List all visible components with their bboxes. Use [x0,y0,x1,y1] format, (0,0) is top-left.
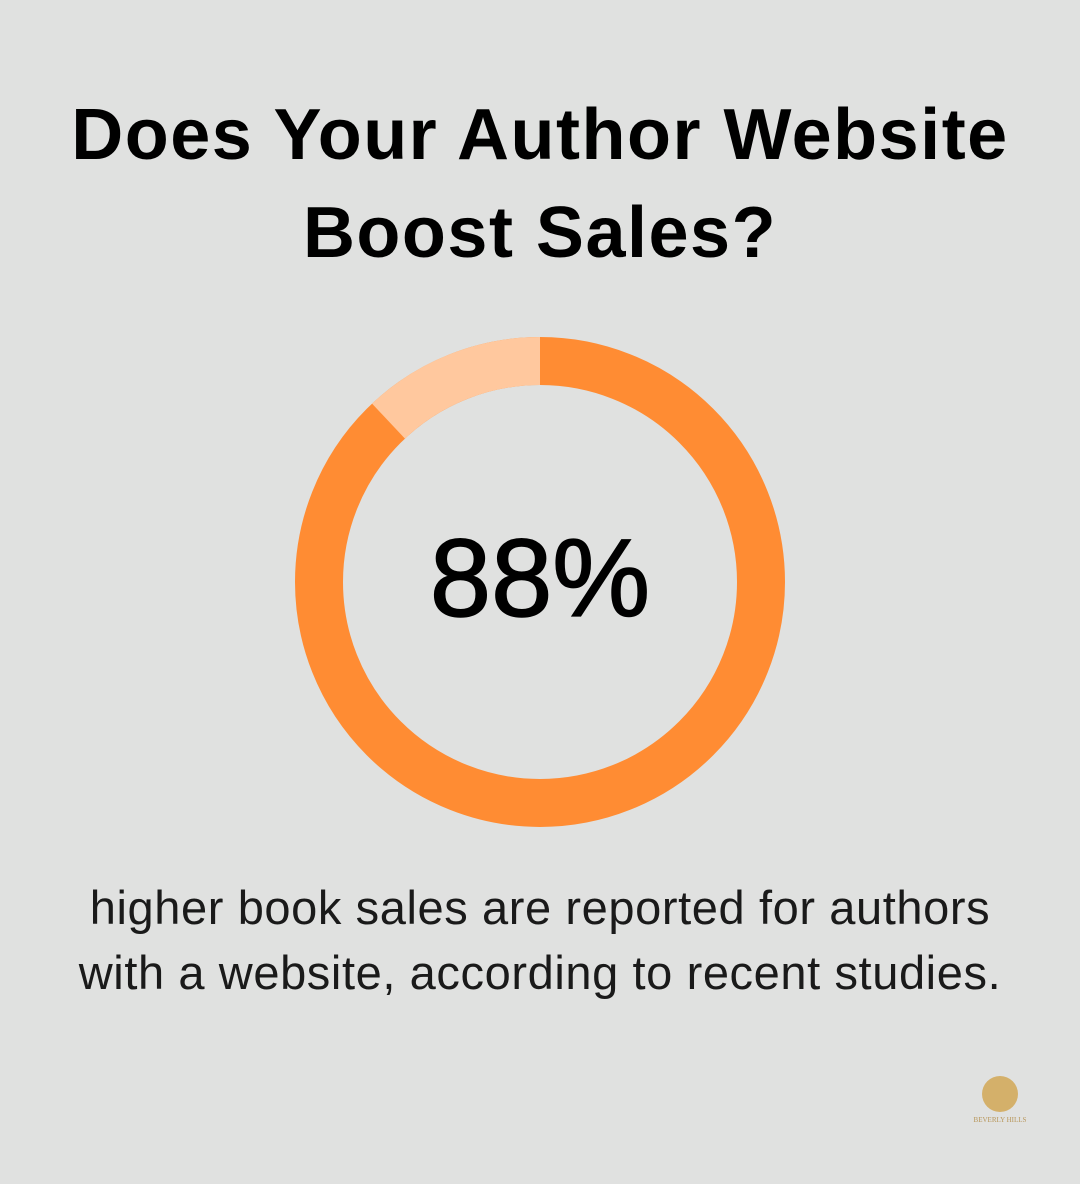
title: Boost Sales? [303,193,777,273]
stat number: 88% [430,517,650,640]
description text [78,881,1001,999]
logo: BEVERLY HILLS [974,1116,1026,1124]
description text: higher book sales are reported for authors [90,881,990,934]
donut: main segment 88% [319,361,761,803]
donut: remaining 12% [388,361,540,421]
description text: with a website, according to recent studies. [79,946,1001,999]
title: Does Your Author Website [71,95,1009,175]
title [71,95,1009,273]
logo [974,1076,1026,1124]
